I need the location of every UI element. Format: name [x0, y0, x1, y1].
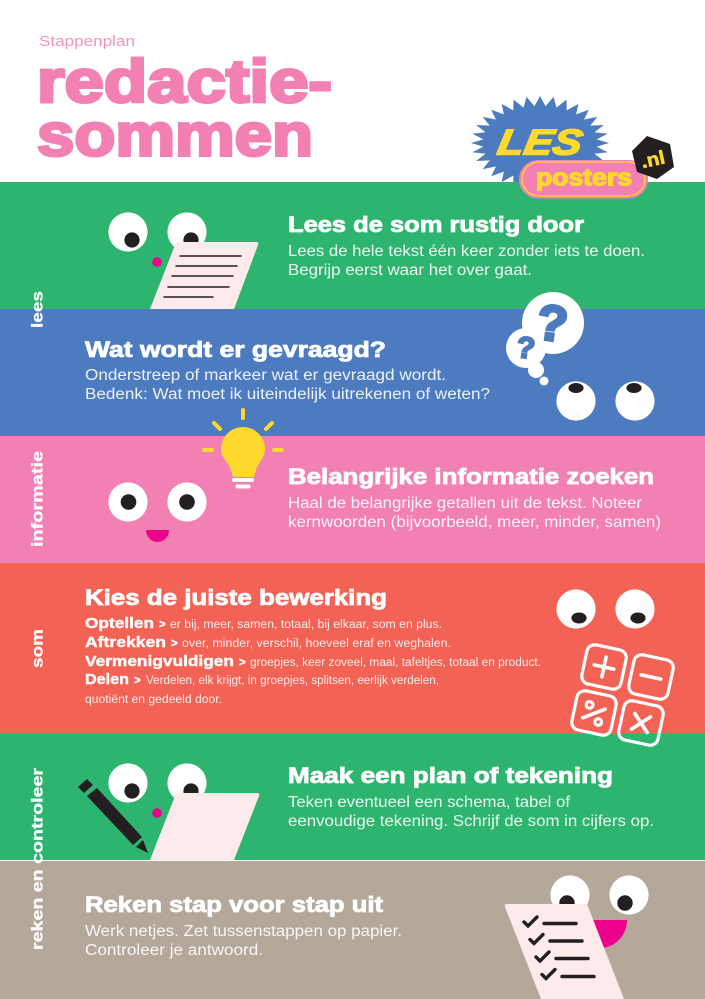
- heading: informatie: Belangrijke informatie zoeken: [288, 464, 654, 489]
- line: delen: >: [134, 675, 141, 687]
- illustration: smiling face: [108, 482, 207, 542]
- text: lees: [288, 243, 645, 279]
- side label: informatie: informatie: [30, 451, 46, 547]
- line: vermenigvuldigen: [85, 653, 541, 670]
- heading: plan: Maak een plan of tekening: [288, 763, 613, 788]
- text: plan: [288, 794, 654, 830]
- text: reken: [85, 923, 402, 959]
- line: aftrekken: Aftrekken: [85, 634, 166, 651]
- line: aftrekken: over, minder, verschil, hoeveel eraf en weghalen.: [182, 638, 451, 650]
- illustration: face with checklist: [505, 875, 649, 999]
- logo: LES posters .nl: LES: [495, 122, 586, 162]
- text: gevraagd: Onderstreep of markeer wat er gevraagd wordt.: [85, 367, 446, 384]
- side label: som: som: [30, 629, 46, 668]
- title: redactie-: [37, 48, 332, 115]
- line: aftrekken: [85, 634, 451, 651]
- text: informatie: Haal de belangrijke getallen uit de tekst. Noteer: [288, 495, 642, 512]
- illustration: eyes looking down: [556, 589, 655, 629]
- icon: thought bubbles with question marks: ?: [533, 294, 571, 353]
- text: informatie: [288, 495, 661, 531]
- logo: LES posters .nl: posters: [536, 164, 632, 192]
- icon: light bulb: [204, 410, 282, 488]
- title: sommen: [37, 102, 313, 168]
- icon: thought bubbles with question marks: [506, 292, 584, 386]
- panel: informatie background: [0, 436, 705, 563]
- text: bewerkingen: [85, 615, 541, 706]
- line: optellen: [85, 615, 442, 632]
- text: informatie: kernwoorden (bijvoorbeeld, meer, minder, samen): [288, 514, 661, 531]
- panel: reken background: [0, 861, 705, 999]
- text: plan: Teken eventueel een schema, tabel of: [288, 794, 571, 811]
- illustration: reading face with paper: [108, 212, 258, 309]
- illustration: eyes looking up: [556, 381, 655, 421]
- line: delen: quotiënt en gedeeld door.: [85, 694, 222, 706]
- logo: LES posters .nl: [495, 122, 674, 198]
- heading: bewerking: Kies de juiste bewerking: [85, 585, 387, 610]
- line: delen: [85, 671, 439, 706]
- panel: lees background: [0, 182, 705, 309]
- line: optellen: >: [159, 619, 166, 631]
- heading: gevraagd: Wat wordt er gevraagd?: [85, 337, 386, 362]
- line: aftrekken: >: [171, 638, 178, 650]
- line: delen: Delen: [85, 671, 129, 688]
- illustration: face with pencil and paper: [78, 763, 259, 860]
- icon: calculator keys: [570, 643, 675, 747]
- panel: som background: [0, 563, 705, 734]
- text: gevraagd: [85, 367, 490, 403]
- heading: lees: Lees de som rustig door: [288, 212, 584, 237]
- line: vermenigvuldigen: groepjes, keer zoveel, maal, tafeltjes, totaal en product.: [250, 657, 541, 669]
- logo: LES posters .nl: .nl: [639, 148, 667, 173]
- icon: starburst behind logo: [471, 96, 609, 190]
- heading: reken: Reken stap voor stap uit: [85, 892, 384, 917]
- line: optellen: er bij, meer, samen, totaal, bij elkaar, som en plus.: [170, 619, 442, 631]
- text: reken: Werk netjes. Zet tussenstappen op papier.: [85, 923, 402, 940]
- line: vermenigvuldigen: >: [239, 657, 246, 669]
- panel: gevraagd background: [0, 309, 705, 436]
- side label: reken en controleer: reken en controleer: [30, 768, 46, 950]
- title: [37, 48, 332, 168]
- icon: thought bubbles with question marks: ?: [514, 331, 537, 366]
- side label: lees: lees: [30, 291, 46, 328]
- text: gevraagd: Bedenk: Wat moet ik uiteindelijk uitrekenen of weten?: [85, 386, 490, 403]
- line: delen: Verdelen, elk krijgt, in groepjes, splitsen, eerlijk verdelen,: [146, 675, 439, 687]
- text: lees: Lees de hele tekst één keer zonder iets te doen.: [288, 243, 645, 260]
- line: vermenigvuldigen: Vermenigvuldigen: [85, 653, 234, 670]
- line: optellen: Optellen: [85, 615, 154, 632]
- divider: [0, 860, 705, 861]
- text: reken: Controleer je antwoord.: [85, 942, 263, 959]
- text: lees: Begrijp eerst waar het over gaat.: [288, 262, 532, 279]
- text: plan: eenvoudige tekening. Schrijf de som in cijfers op.: [288, 813, 654, 830]
- subtitle: Stappenplan: [39, 33, 135, 50]
- panel: plan background: [0, 734, 705, 860]
